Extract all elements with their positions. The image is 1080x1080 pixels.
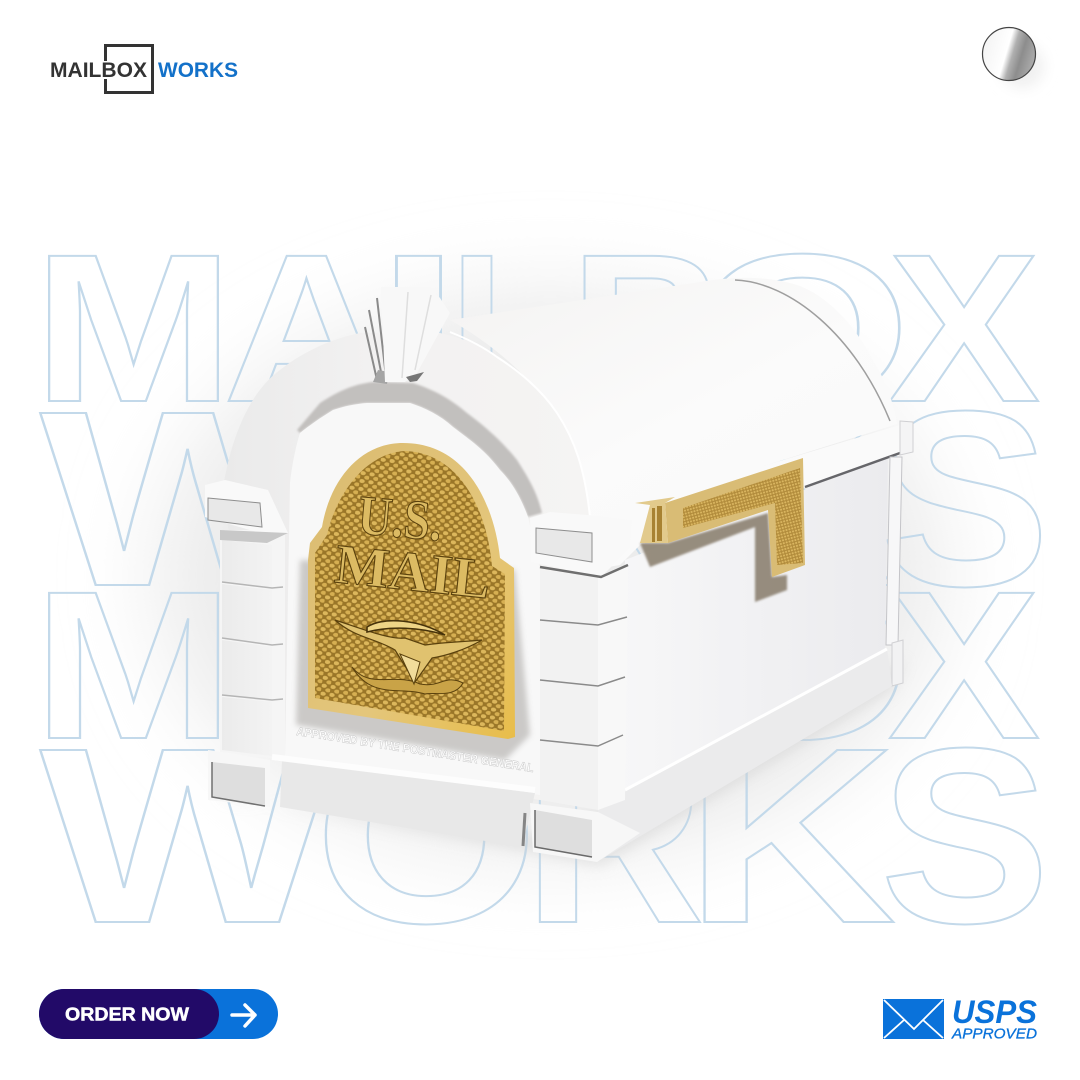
embossed inscription: APPROVED BY THE POSTMASTER GENERAL: [296, 724, 535, 775]
background word: MAILBOX row 1: X: [888, 210, 1040, 446]
button: order now: ORDER NOW: [65, 1004, 190, 1024]
right end post: [886, 421, 913, 686]
background word: MAILBOX row 2: L: [449, 547, 572, 783]
usps approved badge: APPROVED: [951, 1026, 1037, 1042]
brass flag: [635, 458, 805, 577]
usps approved badge: USPS: [952, 994, 1038, 1030]
left top block: [205, 480, 288, 543]
plaque lettering: U.S. MAIL: U.S.: [356, 484, 445, 554]
background word: MAILBOX row 1: L: [449, 210, 572, 446]
background word: MAILBOX row 2: X: [888, 547, 1040, 783]
background word: MAILBOX row 1: [33, 210, 1040, 446]
background word: MAILBOX row 2: B: [570, 547, 727, 783]
plaque lettering: U.S. MAIL: MAIL: [332, 533, 494, 611]
plaque eagle emblem: [335, 620, 482, 694]
front base: [280, 760, 535, 847]
icon: envelope: [883, 999, 944, 1039]
inner arch shadow: [297, 382, 542, 517]
background word: MAILBOX row 2: O: [694, 547, 911, 783]
deco ornament: [365, 287, 450, 384]
colour swatch: chrome: [982, 28, 1036, 80]
outlined background wordmark: [33, 210, 1050, 975]
background word: WORKS row 2: S: [880, 696, 1050, 975]
right brick column: [540, 565, 628, 810]
icon: arrow: [232, 1005, 255, 1026]
background word: WORKS row 2: O: [314, 696, 539, 975]
background word: WORKS row 1: O: [314, 359, 539, 638]
background word: WORKS row 1: K: [685, 359, 896, 638]
front arch: [222, 333, 590, 800]
logo: WORKS: [158, 58, 238, 82]
background word: MAILBOX row 1: O: [694, 210, 911, 446]
left base block: [208, 750, 270, 807]
right top block: [530, 512, 632, 577]
background word: MAILBOX row 2: I: [376, 547, 461, 783]
usps approved badge: [883, 994, 1038, 1042]
product: white mailbox: [205, 278, 913, 866]
left brick column: [220, 530, 285, 760]
background word: WORKS row 1: R: [523, 359, 705, 638]
flag shadow: [640, 513, 787, 602]
background word: WORKS row 2: R: [523, 696, 705, 975]
mailbox drop shadow: [215, 660, 905, 866]
background word: MAILBOX row 1: I: [376, 210, 461, 446]
right base block: [523, 803, 640, 862]
background word: MAILBOX row 2: A: [223, 547, 390, 783]
background word: MAILBOX row 2: M: [33, 547, 234, 783]
side base: [597, 648, 892, 862]
background word: WORKS row 2: [40, 696, 1050, 975]
background word: MAILBOX row 1: A: [223, 210, 390, 446]
background word: WORKS row 2: K: [685, 696, 896, 975]
plaque shadow: [296, 560, 530, 760]
background word: MAILBOX row 2: [33, 547, 1040, 783]
background word: MAILBOX row 1: M: [33, 210, 234, 446]
side top band: [590, 425, 900, 570]
brass plaque: [308, 443, 515, 739]
background word: MAILBOX row 1: B: [570, 210, 727, 446]
background word: WORKS row 2: W: [40, 696, 335, 975]
background word: WORKS row 1: [40, 359, 1050, 638]
background word: WORKS row 1: S: [880, 359, 1050, 638]
side panel: [620, 457, 888, 800]
plaque lettering: U.S. MAIL: [332, 484, 494, 611]
background word: WORKS row 1: W: [40, 359, 335, 638]
logo: MAILBOX: [50, 58, 148, 82]
roof: [450, 278, 897, 522]
inner arch panel: [285, 403, 540, 795]
logo: [50, 46, 238, 92]
button: order now: [39, 989, 278, 1039]
